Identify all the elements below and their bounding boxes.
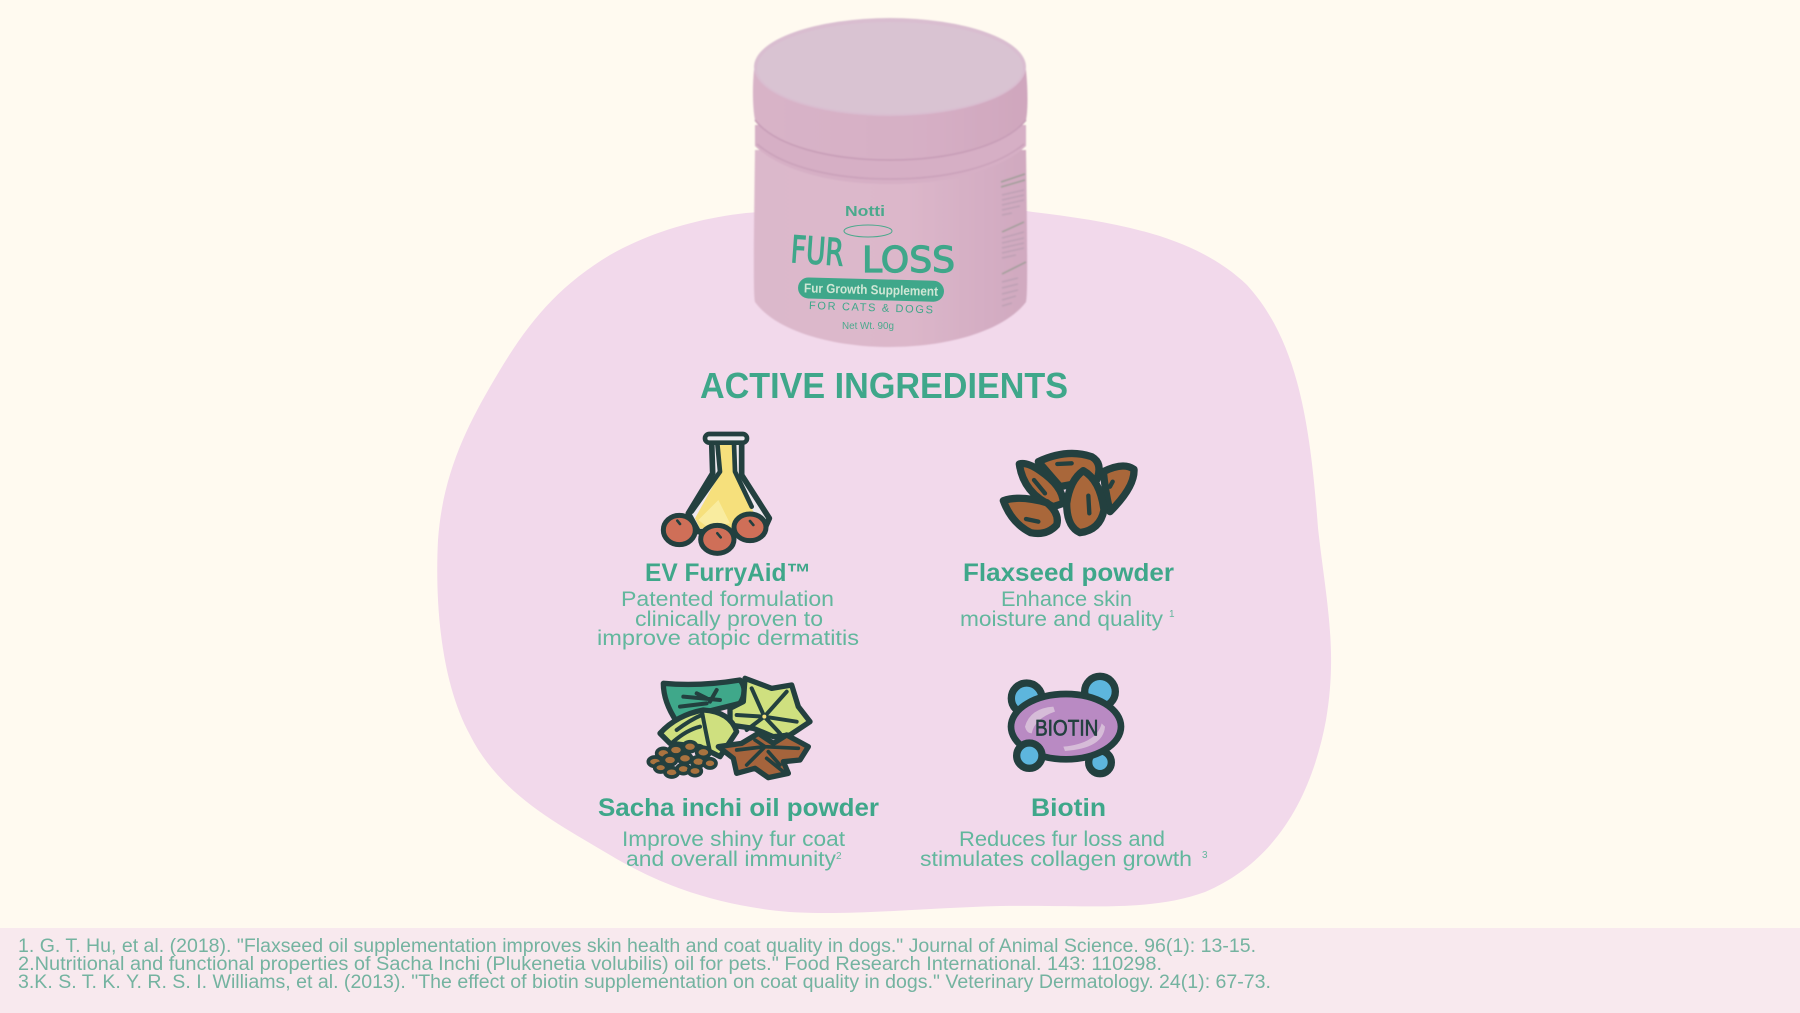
- text: Biotin description: 3: [1202, 850, 1208, 861]
- text: Flaxseed description: Enhance skin: [1001, 588, 1132, 611]
- jar label: brand: Notti: [845, 203, 885, 220]
- text: EV FurryAid description: Patented formulation: [621, 588, 834, 611]
- icon: flask with berries: [663, 434, 769, 553]
- jar label: for cats and dogs: FOR CATS & DOGS: [809, 300, 933, 316]
- text: EV FurryAid description: clinically proven to: [635, 608, 823, 631]
- text: Flaxseed description: moisture and quality: [960, 608, 1164, 631]
- jar label: product name: LOSS: [862, 240, 955, 281]
- jar label: product name: [789, 228, 955, 281]
- text: Biotin description: [920, 828, 1208, 871]
- text: Flaxseed description: 1: [1169, 609, 1175, 620]
- heading: Sacha inchi oil powder: Sacha inchi oil powder: [598, 794, 879, 822]
- text: Biotin description: stimulates collagen growth: [920, 848, 1192, 871]
- footnote panel: [0, 928, 1800, 1013]
- text: Sacha inchi description: and overall immunity: [626, 848, 837, 871]
- text: Sacha inchi description: [622, 828, 845, 871]
- icon: biotin molecule: [1011, 676, 1121, 774]
- text: EV FurryAid description: [597, 588, 859, 650]
- jar label: net weight: Net Wt. 90g: [842, 321, 894, 332]
- jar label: pill: Fur Growth Supplement: [804, 280, 939, 299]
- text: EV FurryAid description: improve atopic dermatitis: [597, 627, 859, 650]
- icon: sacha inchi plants: [648, 678, 810, 778]
- title: ACTIVE INGREDIENTS: [700, 365, 1068, 406]
- product jar: [753, 18, 1028, 347]
- jar label: badge: [844, 225, 892, 237]
- reference 1: 1. G. T. Hu, et al. (2018). "Flaxseed oil supplementation improves skin health and coat quality in dogs." Journal of Animal Science. 96(1): 13-15.: [18, 936, 1256, 957]
- reference 2: 2.Nutritional and functional properties of Sacha Inchi (Plukenetia volubilis) oil for pets." Food Research International. 143: 110298.: [18, 954, 1162, 975]
- background blob: [437, 205, 1331, 913]
- biotin label: BIOTIN: [1035, 716, 1098, 741]
- heading: EV FurryAid: EV FurryAid™: [645, 559, 811, 587]
- text: Biotin description: Reduces fur loss and: [959, 828, 1165, 851]
- heading: Flaxseed powder: Flaxseed powder: [963, 559, 1174, 587]
- text: Sacha inchi description: 2: [836, 851, 842, 862]
- jar label: product name: FUR: [789, 228, 845, 275]
- icon: flaxseeds: [1003, 453, 1134, 533]
- heading: Biotin: Biotin: [1031, 794, 1106, 822]
- reference 3: 3.K. S. T. K. Y. R. S. I. Williams, et al. (2013). "The effect of biotin supplementation on coat quality in dogs." Veterinary Dermatology. 24(1): 67-73.: [18, 972, 1271, 993]
- jar label: pill: [798, 277, 944, 302]
- text: Flaxseed description: [960, 588, 1175, 631]
- text: Sacha inchi description: Improve shiny fur coat: [622, 828, 845, 851]
